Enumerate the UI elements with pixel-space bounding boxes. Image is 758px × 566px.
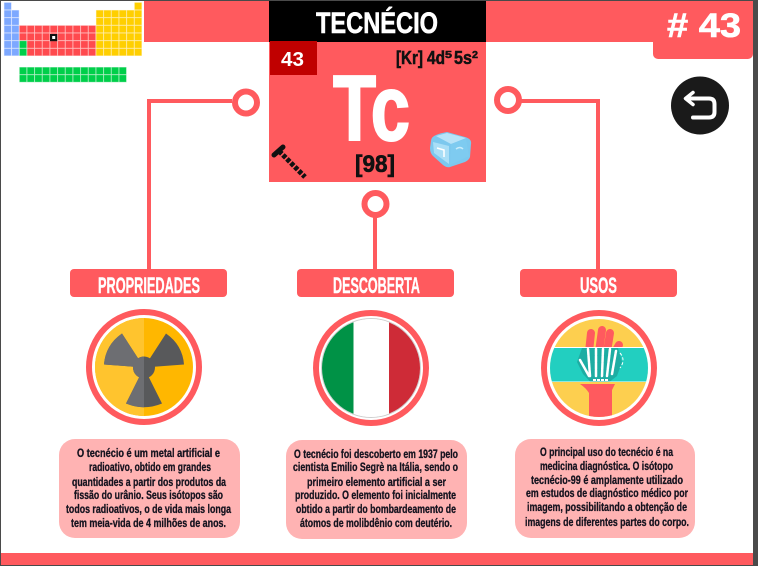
- icon: radiation symbol: [89, 312, 199, 422]
- text block: descoberta: primeiro elemento artificial a ser: [307, 477, 446, 489]
- atomic number: 43: [281, 49, 304, 71]
- element number tab: # 43: [667, 7, 741, 45]
- icon: italian flag: [316, 313, 426, 423]
- text block: descoberta: [286, 440, 467, 539]
- title: TECNÉCIO: [316, 6, 438, 40]
- icon: ice cube: [430, 132, 471, 167]
- connector ring: left: [235, 92, 257, 114]
- title: [269, 1, 486, 42]
- top bar left: [144, 1, 270, 42]
- heading: descoberta: DESCOBERTA: [333, 273, 420, 298]
- heading: propriedades: PROPRIEDADES: [98, 273, 200, 298]
- connector ring: right: [497, 89, 519, 111]
- atomic number: [270, 41, 317, 75]
- icon: back button: [671, 76, 729, 134]
- heading: descoberta: [297, 269, 454, 298]
- text block: descoberta: O tecnécio foi descoberto em 1937 pelo: [294, 449, 458, 461]
- panel: usos: [515, 269, 695, 538]
- text block: usos: [515, 439, 695, 538]
- electron configuration: 5: [445, 50, 453, 61]
- text block: usos: tecnécio-99 é amplamente utilizado: [531, 475, 683, 487]
- highlighted technetium cell: [50, 34, 57, 41]
- text block: descoberta: obtido a partir do bombardeamento de: [296, 504, 456, 516]
- connector lines: [149, 101, 598, 270]
- electron configuration: [Kr]: [396, 48, 423, 68]
- text block: usos: imagens de diferentes partes do corpo.: [525, 517, 689, 529]
- periodic table locator: [4, 2, 142, 82]
- heading: propriedades: [70, 269, 227, 298]
- text block: usos: O principal uso do tecnécio é na: [540, 447, 673, 459]
- text block: usos: medicina diagnóstica. O isótopo: [540, 461, 673, 473]
- bottom band: [1, 553, 753, 565]
- element card: [269, 1, 486, 182]
- text block: propriedades: radioativo, obtido em grandes: [89, 462, 211, 474]
- text block: propriedades: O tecnécio é um metal artificial e: [77, 448, 220, 460]
- text block: propriedades: todos radioativos, o de vida mais longa: [66, 504, 231, 516]
- text block: propriedades: quantidades a partir dos produtos da: [72, 477, 226, 489]
- electron configuration: 4d: [427, 48, 445, 68]
- electron configuration: [396, 48, 478, 68]
- atomic mass: [98]: [355, 151, 395, 178]
- card background: [269, 42, 486, 182]
- panel: propriedades: [59, 269, 240, 538]
- text block: descoberta: cientista Emilio Segrè na Itália, sendo o: [293, 462, 458, 474]
- text block: propriedades: tem meia-vida de 4 milhões de anos.: [71, 518, 226, 530]
- connector ring: center: [364, 193, 386, 215]
- electron configuration: 2: [472, 50, 478, 61]
- text block: usos: imagem, possibilitando a obtenção de: [527, 502, 687, 514]
- panel: descoberta: [286, 269, 467, 539]
- electron configuration: 5s: [454, 48, 472, 68]
- text block: propriedades: fissão do urânio. Seus isótopos são: [74, 490, 223, 502]
- heading: usos: USOS: [580, 273, 617, 298]
- text block: usos: em estudos de diagnóstico médico por: [526, 488, 688, 500]
- heading: usos: [520, 269, 677, 298]
- icon: screw: [274, 147, 305, 177]
- icon: x-ray hand: [544, 313, 654, 423]
- text block: descoberta: produzido. O elemento foi inicialmente: [295, 490, 456, 502]
- text block: propriedades: [59, 439, 240, 538]
- element number tab: [486, 1, 753, 59]
- symbol: Tc: [333, 56, 410, 160]
- text block: descoberta: átomos de molibdênio com deutério.: [300, 518, 452, 530]
